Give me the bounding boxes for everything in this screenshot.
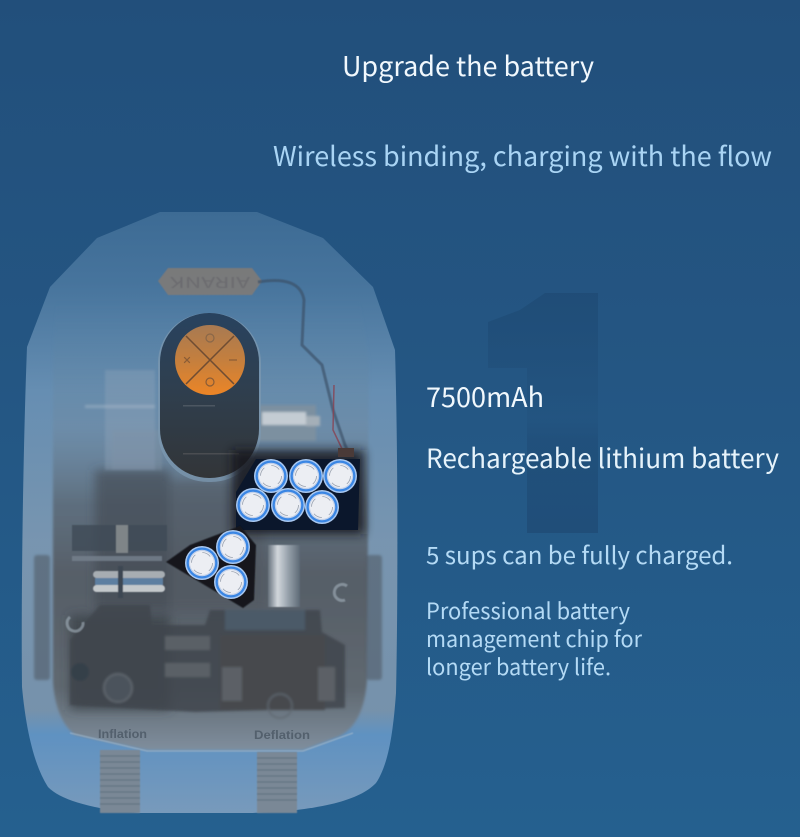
lower bright rim (70, 733, 353, 751)
logo plate (158, 268, 262, 295)
outer shell (22, 212, 397, 813)
orange control dial (175, 325, 245, 395)
small motor (258, 405, 320, 441)
wire (258, 280, 350, 456)
inner body shading (53, 300, 369, 750)
logo plate: AIRANK (170, 272, 250, 293)
control panel oval (158, 313, 261, 482)
battery chip description: longer battery life. (426, 650, 611, 682)
battery chip description: management chip for (426, 622, 642, 654)
inflation label: Inflation (98, 729, 147, 741)
lower battery pack (166, 526, 256, 608)
upper light internal panels (85, 370, 162, 470)
battery chip description: Professional battery (426, 594, 630, 626)
pump body (70, 605, 345, 718)
big background numeral 1 (488, 293, 598, 533)
upper battery pack (232, 448, 364, 534)
device: translucent pump with internals (22, 212, 397, 813)
battery type text: Rechargeable lithium battery (426, 437, 779, 476)
side clips (34, 555, 382, 680)
threaded connector deflation (257, 752, 297, 813)
title: Upgrade the battery (342, 45, 594, 84)
soft dark internal masses (70, 470, 265, 710)
capacity text: 7500mAh (426, 376, 544, 415)
threaded connector inflation (100, 750, 140, 813)
subtitle: Wireless binding, charging with the flow (273, 135, 772, 174)
battery chip description (426, 594, 642, 682)
charge count text: 5 sups can be fully charged. (426, 536, 733, 571)
valve (93, 566, 165, 598)
screw bosses (67, 584, 347, 631)
deflation label: Deflation (254, 730, 310, 742)
left internal mechanism (72, 525, 167, 561)
wire red (333, 385, 345, 455)
small motor cylinder (268, 545, 300, 607)
